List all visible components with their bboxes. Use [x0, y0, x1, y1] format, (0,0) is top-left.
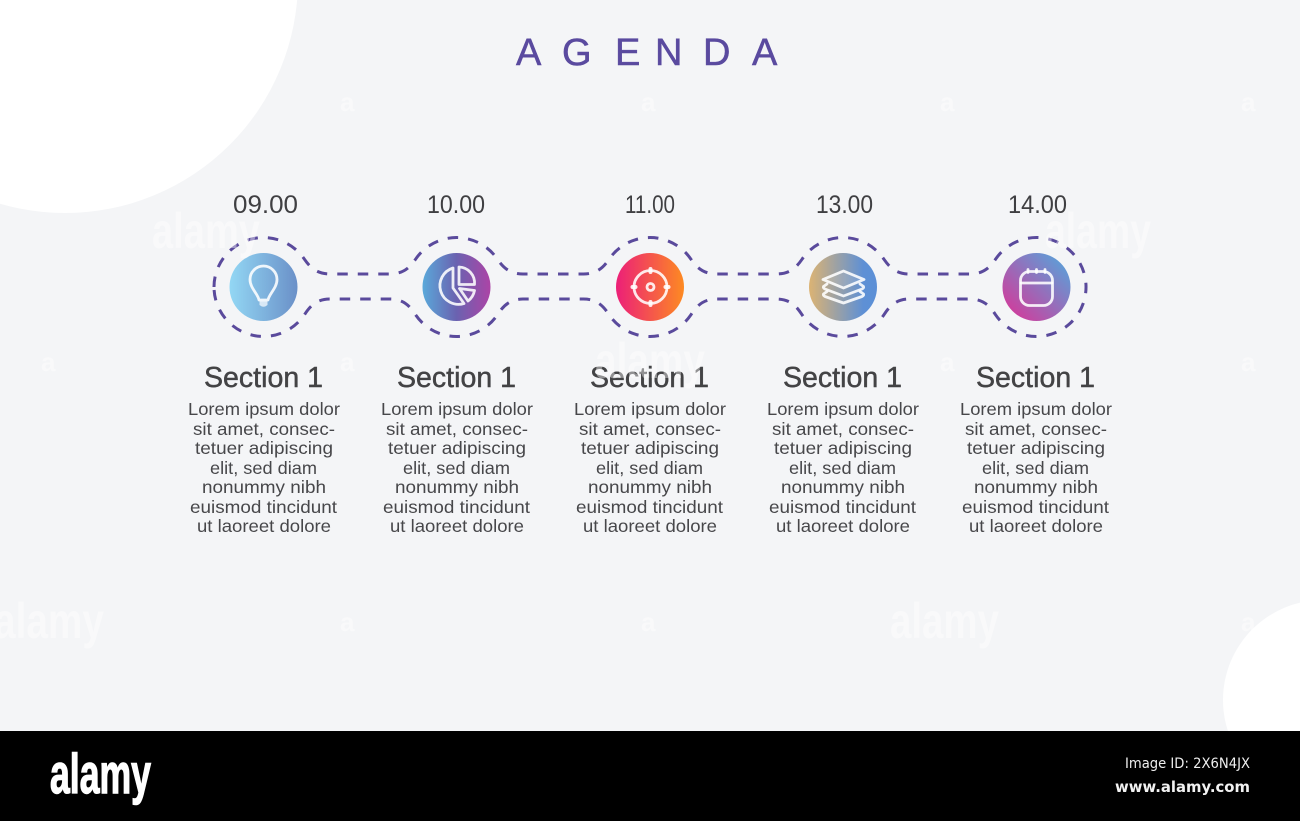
section 3 text block: Section 1	[590, 362, 709, 394]
section 3 text block: euismod tincidunt	[576, 497, 723, 517]
footer band	[0, 731, 1300, 821]
section 5 text block	[960, 362, 1112, 536]
section 4 text block: tetuer adipiscing	[774, 438, 912, 458]
section 4 text block	[767, 362, 919, 536]
section 2 text block	[381, 362, 533, 536]
watermarks: a	[641, 607, 656, 637]
section 5 text block: elit, sed diam	[982, 458, 1089, 478]
icon: layers	[809, 253, 877, 321]
section 2 text block: sit amet, consec-	[386, 419, 528, 439]
watermarks: a	[940, 87, 955, 117]
website: www.alamy.com	[1115, 778, 1250, 796]
section 5 text block: Section 1	[976, 362, 1095, 394]
section 3 text block: nonummy nibh	[588, 477, 712, 497]
watermarks: a	[340, 347, 355, 377]
section 2 text block: euismod tincidunt	[383, 497, 530, 517]
section 1 text block: elit, sed diam	[210, 458, 317, 478]
time 10.00: 10.00	[427, 191, 485, 219]
section 4 text block: elit, sed diam	[789, 458, 896, 478]
watermarks: a	[1241, 347, 1256, 377]
section 5 text block: tetuer adipiscing	[967, 438, 1105, 458]
section 1 text block: Section 1	[204, 362, 323, 394]
section 4 text block: euismod tincidunt	[769, 497, 916, 517]
section 2 text block: Lorem ipsum dolor	[381, 399, 533, 419]
section 2 text block: Section 1	[397, 362, 516, 394]
section 2 text block: ut laoreet dolore	[390, 516, 524, 536]
section 3 text block: tetuer adipiscing	[581, 438, 719, 458]
section 1 text block: Lorem ipsum dolor	[188, 399, 340, 419]
watermarks: a	[340, 87, 355, 117]
watermarks: alamy	[595, 333, 705, 389]
section 4 text block: Section 1	[783, 362, 902, 394]
section 3 text block	[574, 362, 726, 536]
footer logo: alamy	[50, 742, 151, 805]
watermarks: a	[940, 347, 955, 377]
section 1 text block: sit amet, consec-	[193, 419, 335, 439]
section 1 text block: tetuer adipiscing	[195, 438, 333, 458]
section 4 text block: sit amet, consec-	[772, 419, 914, 439]
decorative circle: bottom right	[1223, 600, 1300, 800]
section 3 text block: elit, sed diam	[596, 458, 703, 478]
time 11.00: 11.00	[625, 191, 675, 219]
watermarks: a	[641, 87, 656, 117]
section 3 text block: sit amet, consec-	[579, 419, 721, 439]
decorative circle: top left	[0, 0, 298, 213]
section 5 text block: sit amet, consec-	[965, 419, 1107, 439]
section 1 text block: ut laoreet dolore	[197, 516, 331, 536]
icon: light bulb	[230, 253, 298, 321]
watermarks: alamy	[152, 203, 260, 259]
watermarks: a	[41, 347, 56, 377]
watermarks	[0, 87, 1256, 649]
section 1 text block: nonummy nibh	[202, 477, 326, 497]
watermarks: a	[1241, 87, 1256, 117]
section 5 text block: euismod tincidunt	[962, 497, 1109, 517]
dashed timeline outline	[214, 238, 1086, 336]
section 3 text block: ut laoreet dolore	[583, 516, 717, 536]
section 2 text block: elit, sed diam	[403, 458, 510, 478]
section 1 text block	[188, 362, 340, 536]
section 4 text block: nonummy nibh	[781, 477, 905, 497]
watermarks: a	[1241, 607, 1256, 637]
icon: target	[616, 253, 684, 321]
times	[233, 191, 1067, 219]
time 14.00: 14.00	[1008, 191, 1067, 219]
time 13.00: 13.00	[816, 191, 873, 219]
section 2 text block: nonummy nibh	[395, 477, 519, 497]
icon: calendar	[1002, 253, 1070, 321]
watermarks: alamy	[1045, 203, 1151, 259]
section 1 text block: euismod tincidunt	[190, 497, 337, 517]
time 09.00: 09.00	[233, 191, 298, 219]
image id: Image ID: 2X6N4JX	[1125, 756, 1250, 772]
section 5 text block: nonummy nibh	[974, 477, 1098, 497]
section 5 text block: ut laoreet dolore	[969, 516, 1103, 536]
watermarks: a	[340, 607, 355, 637]
icon: pie chart	[422, 253, 490, 321]
watermarks: alamy	[890, 593, 999, 649]
section 4 text block: ut laoreet dolore	[776, 516, 910, 536]
section 2 text block: tetuer adipiscing	[388, 438, 526, 458]
section 4 text block: Lorem ipsum dolor	[767, 399, 919, 419]
section 3 text block: Lorem ipsum dolor	[574, 399, 726, 419]
section 5 text block: Lorem ipsum dolor	[960, 399, 1112, 419]
title: AGENDA	[516, 32, 778, 74]
